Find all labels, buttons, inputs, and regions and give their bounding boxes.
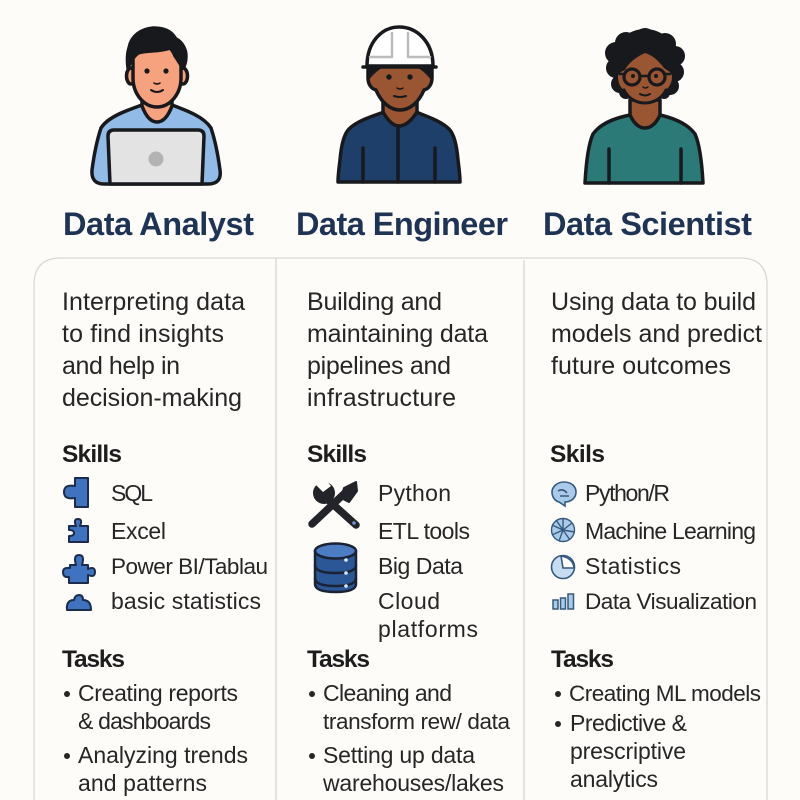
text block: scientist description: models and predict	[551, 320, 762, 348]
list: analyst skills: SQL	[111, 480, 153, 506]
panel: comparison card	[34, 258, 767, 800]
text block: analyst description: and help in	[62, 352, 180, 380]
list: scientist skills: Data Visualization	[585, 589, 757, 614]
list: scientist skills: Statistics	[585, 553, 681, 579]
list: analyst tasks: and patterns	[78, 770, 207, 796]
heading: Data Engineer: Data Engineer	[296, 206, 508, 242]
list: engineer tasks: transform rew/ data	[323, 709, 510, 734]
text block: engineer description: Building and	[307, 288, 442, 316]
icon: puzzle piece Excel	[69, 519, 88, 542]
heading: analyst skills: Skills	[62, 441, 122, 468]
icon: data engineer with hard hat	[338, 27, 460, 182]
heading: engineer tasks: Tasks	[307, 646, 370, 673]
heading: scientist tasks: Tasks	[551, 646, 614, 673]
icon: pie chart statistics	[552, 556, 574, 578]
text block: analyst description: to find insights	[62, 320, 224, 348]
list: analyst tasks: Analyzing trends	[78, 742, 248, 768]
text block: analyst description: decision-making	[62, 384, 242, 412]
icon: database cylinder	[315, 544, 356, 592]
list: engineer skills: Cloud	[378, 588, 440, 614]
list: scientist skills: Python/R	[585, 480, 670, 506]
text block: engineer description	[307, 288, 488, 412]
icon: neural network wheel	[552, 518, 574, 542]
list: engineer skills: Big Data	[378, 553, 463, 579]
text block: analyst description	[62, 288, 245, 412]
list: analyst tasks	[64, 680, 248, 796]
list: scientist tasks	[555, 681, 761, 792]
text block: engineer description: maintaining data	[307, 320, 488, 348]
text block: engineer description: infrastructure	[307, 384, 456, 412]
list: scientist tasks: Predictive &	[570, 710, 687, 736]
heading: engineer skills: Skills	[307, 441, 367, 468]
list: engineer skills: ETL tools	[378, 518, 470, 544]
text block: scientist description: Using data to build	[551, 288, 756, 316]
list: engineer tasks	[309, 680, 510, 796]
heading: Data Analyst: Data Analyst	[63, 206, 254, 242]
list: engineer skills: Python	[378, 480, 451, 506]
list: engineer tasks: Setting up data	[323, 742, 475, 768]
heading: scientist skills: Skils	[550, 441, 605, 468]
list: engineer skills: platforms	[378, 616, 478, 642]
text block: scientist description	[551, 288, 762, 380]
icon: data analyst with laptop	[92, 28, 220, 184]
icon: speech bubble brain	[552, 482, 576, 506]
list: analyst skills: basic statistics	[111, 588, 261, 614]
list: scientist skills	[585, 480, 757, 614]
list: analyst skills	[111, 480, 268, 614]
list: engineer tasks: Cleaning and	[323, 680, 452, 706]
list: engineer skills	[378, 480, 478, 642]
text block: analyst description: Interpreting data	[62, 288, 245, 316]
list: analyst skills: Power BI/Tablau	[111, 554, 268, 579]
icon: puzzle piece statistics	[67, 595, 91, 610]
heading: Data Scientist: Data Scientist	[543, 206, 752, 242]
list: scientist tasks: analytics	[570, 766, 658, 792]
icon: crossed wrench and screwdriver	[312, 477, 357, 525]
icon: puzzle piece Power BI	[63, 555, 95, 583]
list: scientist tasks: prescriptive	[570, 738, 686, 764]
icon: bar chart	[553, 594, 574, 609]
icon: puzzle piece SQL	[64, 478, 88, 507]
list: scientist skills: Machine Learning	[585, 518, 756, 544]
heading: analyst tasks: Tasks	[62, 646, 125, 673]
text block: engineer description: pipelines and	[307, 352, 451, 380]
list: engineer tasks: warehouses/lakes	[322, 770, 504, 796]
list: analyst skills: Excel	[111, 518, 166, 544]
list: analyst tasks: & dashboards	[78, 708, 211, 734]
list: analyst tasks: Creating reports	[78, 680, 238, 706]
list: scientist tasks: Creating ML models	[569, 681, 761, 706]
icon: data scientist with curly hair and glasses	[585, 28, 703, 183]
text block: scientist description: future outcomes	[551, 352, 731, 380]
